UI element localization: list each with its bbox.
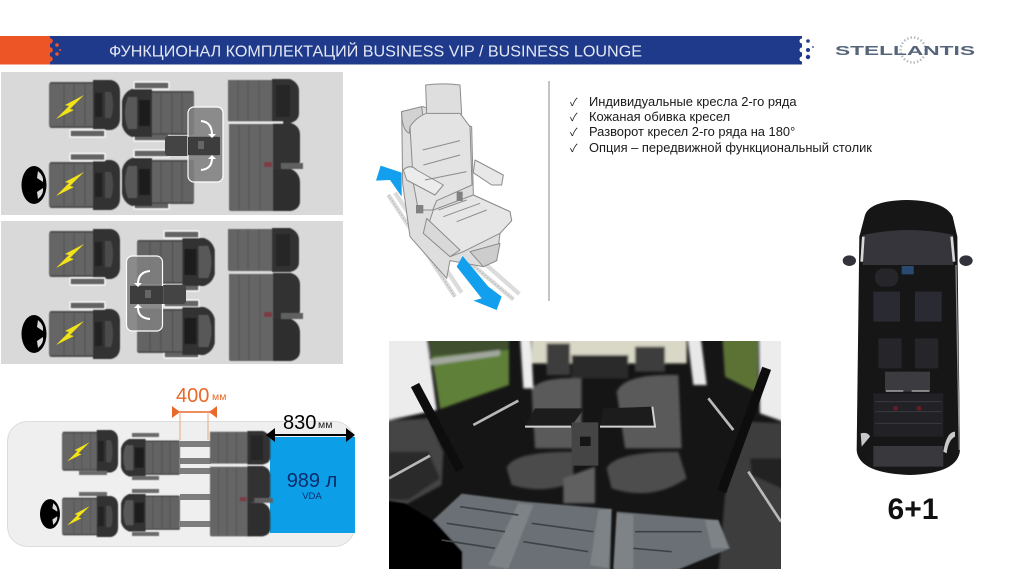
seat illustration with sliding arrows — [376, 84, 519, 310]
feature 4: ✓ — [570, 143, 578, 155]
icon: rear arrow — [376, 166, 402, 197]
feature 2: ✓ — [570, 112, 578, 124]
icon: electric bolts — [56, 244, 84, 345]
cargo volume label: VDA — [302, 491, 322, 502]
right blue dots — [800, 38, 804, 62]
seat rails — [180, 441, 211, 527]
feature 2: Кожаная обивка кресел — [589, 109, 730, 124]
seats — [62, 430, 273, 537]
title: ФУНКЦИОНАЛ КОМПЛЕКТАЦИЙ BUSINESS VIP / BUSINESS LOUNGE — [109, 42, 642, 60]
second row seats — [137, 231, 215, 358]
panel: cargo layout — [8, 385, 355, 546]
rails — [388, 193, 519, 299]
icon: steering wheel — [40, 499, 60, 529]
door details — [389, 368, 781, 552]
features list — [570, 94, 872, 155]
cargo area — [270, 437, 355, 533]
feature 3: ✓ — [570, 127, 578, 139]
icon: steering wheel — [22, 166, 46, 204]
dimension: 830 mm: 830 — [283, 412, 316, 434]
cargo volume label: 989 л — [287, 470, 337, 492]
panel: seat layout forward facing — [1, 72, 343, 215]
dimension: 830 mm: мм — [318, 419, 332, 431]
table — [130, 285, 186, 304]
folding table — [525, 408, 584, 427]
panel: seat layout rear facing — [1, 221, 343, 364]
icon: steering wheel — [22, 315, 46, 353]
table — [165, 136, 220, 156]
icon: front arrow — [457, 256, 502, 310]
rotation callout — [188, 107, 223, 182]
right header dots — [806, 39, 814, 59]
second row seats — [122, 82, 194, 209]
third row seats — [228, 228, 303, 361]
feature 1: ✓ — [570, 97, 578, 109]
seat body — [402, 84, 512, 278]
logo: Stellantis: STELLANTIS — [835, 43, 976, 58]
cargo volume label — [287, 470, 337, 502]
rotation callout — [126, 256, 163, 331]
feature 1: Индивидуальные кресла 2-го ряда — [589, 94, 797, 109]
icon: electric bolts — [67, 442, 90, 525]
feature 4: Опция – передвижной функциональный столик — [589, 140, 872, 155]
front seats — [49, 80, 120, 210]
header bar — [0, 36, 804, 64]
front seats — [49, 229, 120, 359]
third row seats — [228, 79, 303, 211]
left orange dots — [47, 38, 61, 62]
dimension: 400 mm — [172, 385, 226, 440]
dimension: 830 mm — [266, 412, 355, 442]
logo: Stellantis — [835, 38, 976, 62]
icon: electric bolts — [56, 95, 84, 196]
dimension: 400 mm: 400 — [176, 385, 209, 407]
seat configuration label: 6+1 — [888, 493, 938, 526]
divider — [548, 81, 550, 301]
dimension: 400 mm: мм — [212, 391, 226, 403]
vehicle top view — [843, 200, 973, 475]
feature 3: Разворот кресел 2-го ряда на 180° — [589, 124, 795, 139]
interior photo — [389, 341, 781, 569]
